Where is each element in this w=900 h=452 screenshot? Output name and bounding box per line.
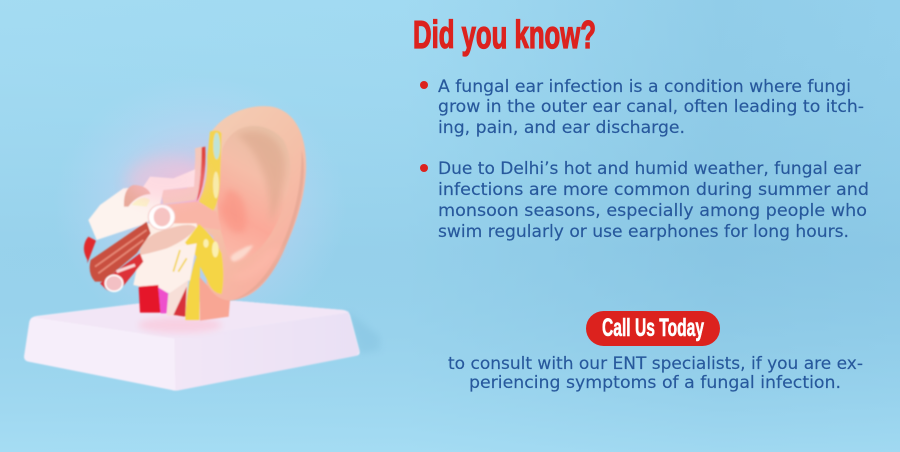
model body xyxy=(84,106,306,321)
pink light flare xyxy=(127,157,207,203)
bullet point one: ing, pain, and ear discharge. xyxy=(438,118,685,138)
glow behind ear xyxy=(53,73,347,340)
upper yellow cartilage xyxy=(199,130,222,211)
illustration: anatomical ear model xyxy=(24,73,380,391)
call-to-action button xyxy=(586,311,720,346)
call-to-action button: Call Us Today xyxy=(602,314,704,342)
lower red and pink tissue xyxy=(139,250,188,317)
bullet point one xyxy=(420,77,864,138)
upper bone and red canal wall xyxy=(161,147,205,204)
base shadow xyxy=(347,310,380,354)
bullet point two: infections are more common during summer and xyxy=(438,180,869,200)
pillar under canal xyxy=(199,277,230,321)
bullet point two: monsoon seasons, especially among people who xyxy=(438,201,867,221)
ear pinna xyxy=(197,106,306,301)
closing text: to consult with our ENT specialists, if you are ex- xyxy=(448,354,863,374)
lower speckled bone xyxy=(140,225,196,255)
closing text xyxy=(448,354,863,393)
white model base xyxy=(24,301,360,391)
bullet point two: swim regularly or use earphones for long hours. xyxy=(438,222,849,242)
white filler behind canal xyxy=(143,223,200,257)
red muscle bundle xyxy=(84,222,151,292)
bullet point one: grow in the outer ear canal, often leading to itch- xyxy=(438,97,864,117)
bullet point two xyxy=(420,159,869,242)
heading: Did you know? xyxy=(413,14,596,57)
closing text: periencing symptoms of a fungal infection. xyxy=(469,373,841,393)
bullet point two: Due to Delhi’s hot and humid weather, fungal ear xyxy=(438,159,862,179)
bullet point one: A fungal ear infection is a condition where fungi xyxy=(438,77,851,97)
lower yellow cartilage xyxy=(185,224,223,320)
eardrum ring xyxy=(148,204,175,230)
white inner ear structures xyxy=(88,169,197,293)
ear canal flesh xyxy=(160,202,222,230)
